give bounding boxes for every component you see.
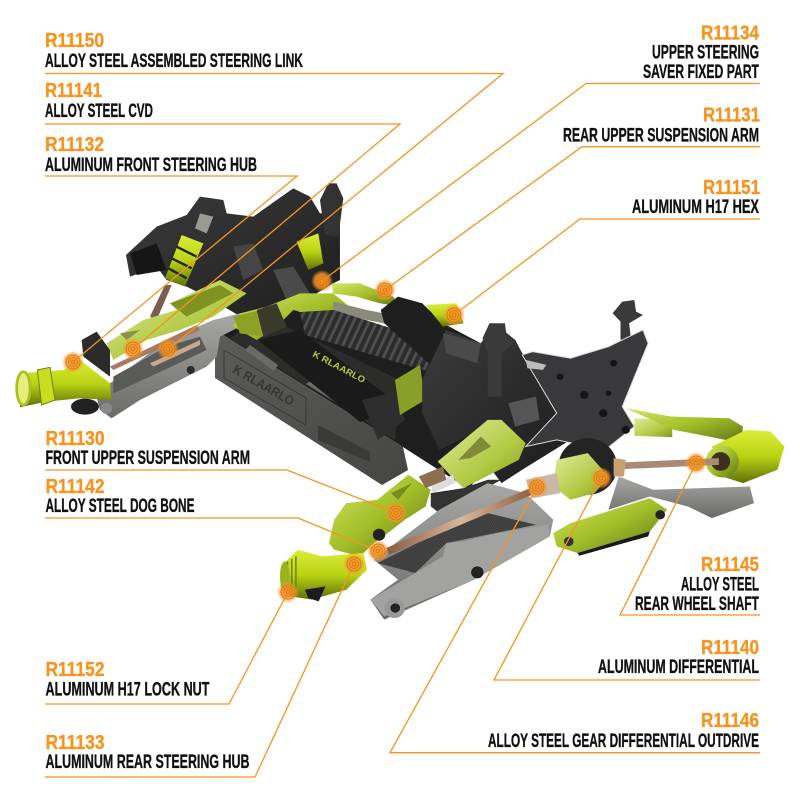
label: R11141: R11141: [45, 80, 102, 102]
label: R11142: R11142: [46, 476, 104, 498]
icon: target markers: [62, 270, 707, 603]
label: R11134: [643, 22, 760, 83]
label: R11133: ALUMINUM REAR STEERING HUB: [46, 751, 250, 773]
label: R11133: R11133: [46, 732, 104, 754]
label: R11141: ALLOY STEEL CVD: [45, 100, 153, 122]
battery box: [215, 296, 510, 490]
leader line: R11140: [494, 478, 760, 680]
label: R11142: [46, 476, 194, 517]
rear dog bones: [386, 487, 536, 555]
rear left lower arm: [370, 483, 553, 620]
label: R11146: [488, 710, 759, 752]
label: R11131: [563, 104, 760, 146]
steering link front: [332, 283, 400, 307]
leader line: R11146: [390, 487, 760, 753]
label: R11150: R11150: [45, 30, 104, 52]
front dog bone: [110, 325, 200, 370]
differential: [553, 453, 608, 500]
label: R11146: R11146: [701, 710, 759, 732]
car chassis illustration: [17, 183, 784, 620]
label: R11151: R11151: [703, 177, 760, 199]
leader line: R11141: [45, 124, 400, 349]
rear right upper arm: [634, 418, 672, 437]
rear left hub: [280, 550, 367, 601]
battery box: K RLAARLO: [230, 362, 297, 409]
label: R11145: [635, 554, 759, 615]
leader line: R11142: [45, 518, 378, 551]
label: R11132: ALUMINUM FRONT STEERING HUB: [45, 154, 257, 176]
strap logo: K RLAARLO: [311, 349, 367, 385]
label: R11134: R11134: [701, 22, 760, 44]
shock absorber right: [297, 233, 323, 270]
leader line: R11131: [385, 147, 760, 290]
label: R11150: ALLOY STEEL ASSEMBLED STEERING LINK: [45, 50, 303, 72]
rear body post: [483, 323, 515, 397]
label: R11140: R11140: [701, 637, 759, 659]
centre bulkhead parts: [233, 293, 353, 340]
front wing and bulkhead: [126, 188, 340, 327]
label: R11133: [46, 732, 250, 773]
label: R11152: [46, 659, 210, 700]
left upper arm and hub carrier: [329, 475, 431, 556]
label: R11132: [45, 134, 257, 176]
label: R11152: R11152: [46, 659, 104, 681]
battery strap: [258, 330, 400, 422]
label: R11140: [598, 637, 759, 678]
leader line: R11133: [45, 564, 354, 777]
leader line: R11152: [45, 592, 288, 704]
rear bulkhead: [422, 323, 570, 483]
rear upper arm: [438, 420, 526, 488]
leader line: R11130: [45, 470, 396, 513]
label: R11130: R11130: [46, 428, 104, 450]
dark under arm: [431, 480, 502, 513]
rear section: [280, 297, 784, 620]
spur gear: [558, 438, 617, 495]
label: R11141: [45, 80, 153, 122]
label: R11131: R11131: [703, 104, 760, 126]
rear right hub: [706, 430, 784, 483]
steering mount: [381, 297, 481, 377]
front hub: [17, 332, 112, 415]
label: R11152: ALUMINUM H17 LOCK NUT: [46, 678, 210, 700]
label: R11150: [45, 30, 303, 72]
label: R11130: [46, 428, 250, 469]
label: R11145: R11145: [701, 554, 759, 576]
front upper arm: [107, 280, 247, 360]
leader line: R11145: [620, 463, 760, 615]
shock absorber left: [165, 235, 203, 287]
label: R11151: [632, 177, 760, 218]
carbon top plate: [300, 310, 444, 372]
front section: [17, 183, 400, 418]
right turnbuckle: [626, 408, 743, 443]
rear shock tower: [522, 300, 648, 450]
lime side plate: [395, 365, 425, 415]
label: R11132: R11132: [45, 134, 104, 156]
leader line: R11134: [322, 84, 760, 281]
foam block: [362, 392, 405, 440]
leader line: R11151: [454, 219, 760, 315]
leader line: R11132: [45, 176, 297, 362]
leader line: R11150: [45, 74, 503, 349]
front lower arm: [97, 313, 253, 418]
label: R11130: FRONT UPPER SUSPENSION ARM: [46, 447, 250, 469]
lime lower block: [553, 498, 667, 553]
label: R11142: ALLOY STEEL DOG BONE: [46, 495, 194, 517]
rear right lower arm: [608, 476, 754, 518]
